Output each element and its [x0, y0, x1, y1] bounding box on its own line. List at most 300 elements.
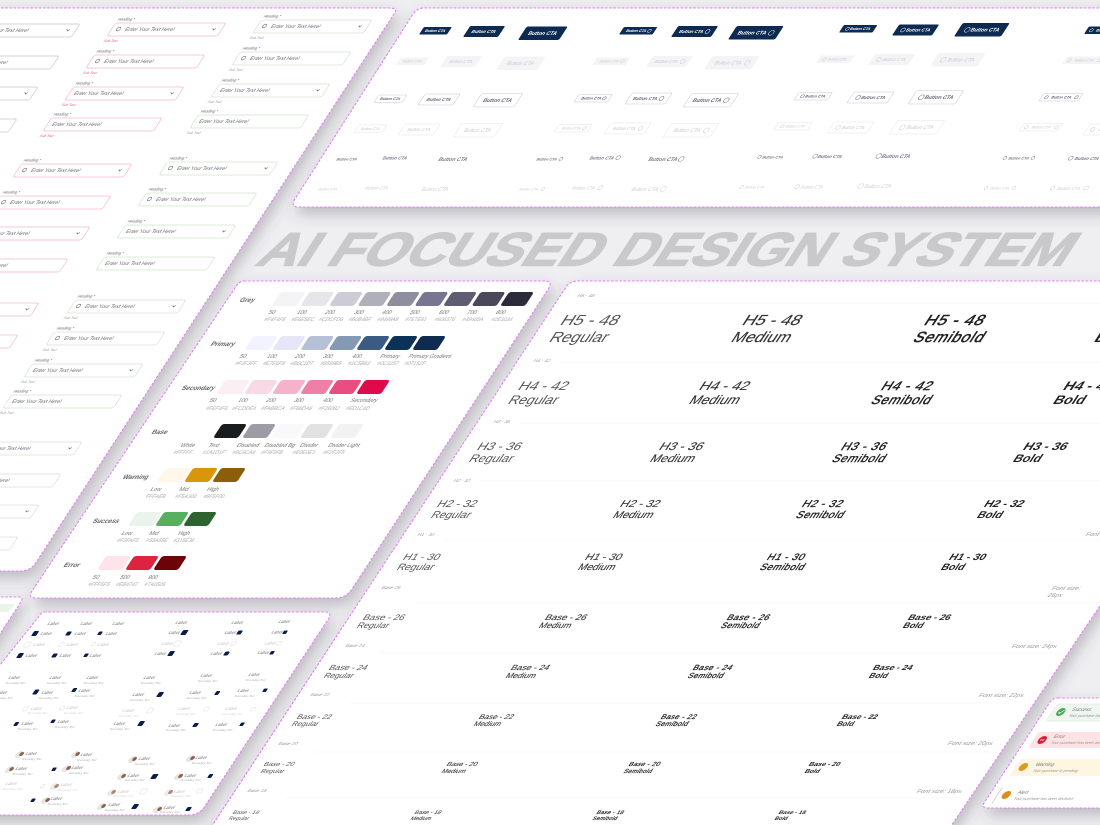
- success input fields: Sub Text: [249, 35, 266, 40]
- avatar rows: Secondary Text: [158, 810, 181, 814]
- outlined light buttons row: Button CTA: [406, 128, 432, 133]
- text buttons row: Button CTA: [1007, 156, 1031, 160]
- primary swatches: 400: [350, 353, 364, 360]
- avatar rows: Secondary Text: [46, 802, 69, 806]
- Base 22 type row: Medium: [472, 720, 504, 728]
- default input fields: [0, 24, 80, 132]
- outlined buttons row: Button CTA: [804, 94, 827, 99]
- Base 26 type row: [355, 586, 1082, 630]
- avatar rows: Secondary Text: [56, 788, 79, 792]
- avatar rows: Label: [116, 789, 130, 795]
- avatar rows: Label: [183, 773, 197, 779]
- disabled buttons row: Button CTA: [505, 62, 535, 67]
- Base 26 type row: Base - 26: [725, 613, 773, 622]
- primary buttons row: [419, 23, 1100, 40]
- panel: buttons: [293, 8, 1100, 207]
- success swatches: #55A55E: [144, 538, 169, 544]
- title: AI FOCUSED DESIGN SYSTEM: [248, 223, 1092, 275]
- success input fields: Sub Text: [20, 379, 37, 384]
- disabled buttons row: [396, 53, 1100, 70]
- toast: warning: [1009, 759, 1100, 776]
- text buttons row: Button CTA: [1073, 156, 1100, 162]
- outlined buttons row: Button CTA: [379, 96, 402, 101]
- success input fields: Heading *: [55, 326, 76, 330]
- error input fields: Heading *: [22, 158, 43, 162]
- error input fields: Heading *: [95, 49, 116, 53]
- warning swatches: [121, 468, 246, 500]
- Base 26 type row: Base - 26: [360, 613, 407, 623]
- outlined buttons row: Button CTA: [691, 99, 723, 104]
- H1 type row: H1 - 30: [582, 552, 625, 563]
- grey swatches: #606576: [433, 317, 456, 323]
- checkbox rows without secondary text: Label: [230, 620, 244, 626]
- primary swatches: Primary: [209, 341, 237, 348]
- H2 type row: [428, 479, 1028, 521]
- Base 24 type row: Base - 24: [871, 663, 915, 672]
- avatar rows: Label: [4, 781, 18, 787]
- checkbox rows with secondary text: Label: [112, 721, 126, 727]
- H4 type row: [505, 359, 1100, 407]
- warning swatches: Warning: [121, 474, 150, 481]
- checkbox rows with secondary text: Label: [7, 675, 21, 681]
- base swatches: Base: [150, 429, 169, 436]
- success input fields: Heading *: [12, 389, 33, 393]
- disabled buttons row: Button CTA: [713, 61, 743, 67]
- outlined buttons row: Button CTA: [859, 96, 887, 101]
- checkbox rows with secondary text: Secondary Text: [211, 728, 234, 732]
- outlined light buttons row: Button CTA: [905, 126, 935, 131]
- checkbox rows with secondary text: Secondary Text: [221, 712, 244, 716]
- primary swatches: #3C5B83: [346, 361, 371, 367]
- base swatches: Divider: [298, 442, 320, 449]
- success input fields: Heading *: [105, 251, 126, 255]
- Base 20 type row: Base - 20: [445, 762, 479, 768]
- grey swatches: 700: [465, 309, 479, 316]
- error input fields: Heading *: [1, 190, 22, 194]
- Base 24 type row: [322, 644, 1059, 680]
- disabled buttons row: Button CTA: [599, 59, 621, 64]
- checkbox rows with secondary text: Secondary Text: [164, 728, 187, 732]
- primary swatches: #8599B5: [318, 361, 343, 367]
- H2 type row: H2 - 32: [799, 499, 846, 510]
- primary buttons row: Button CTA: [677, 30, 705, 35]
- checkbox rows without secondary text: Label: [277, 619, 291, 625]
- text light buttons row: Button CTA: [630, 187, 660, 193]
- checkbox rows without secondary text: Label: [223, 630, 237, 636]
- primary swatches: 50: [238, 353, 249, 360]
- error input fields: Sub Text: [103, 38, 120, 43]
- H1 type row: Bold: [938, 562, 968, 573]
- success input fields: Heading *: [126, 219, 147, 223]
- primary buttons row: Button CTA: [625, 28, 648, 33]
- checkbox rows without secondary text: Label: [46, 621, 60, 627]
- H5 type row: H5 - 48: [739, 312, 807, 328]
- error swatches: 50: [91, 574, 102, 581]
- avatar rows: Secondary Text: [103, 808, 126, 812]
- H3 type row: H3 - 36: [492, 420, 512, 425]
- warning swatches: #8F5F00: [201, 494, 226, 500]
- secondary swatches: 50: [208, 397, 219, 404]
- avatar rows: Secondary Text: [1, 787, 24, 791]
- base swatches: Disabled Bg: [263, 442, 298, 449]
- checkbox rows without secondary text: Label: [153, 651, 167, 657]
- Base 20 type row: Base-20: [277, 742, 299, 747]
- grey swatches: #7E7E91: [403, 317, 428, 323]
- Base 18 type row: Regular: [227, 817, 250, 822]
- H2 type row: Bold: [974, 510, 1006, 521]
- text buttons row: Button CTA: [535, 157, 559, 161]
- checkbox rows without secondary text: Label: [160, 641, 174, 647]
- success input fields: Enter Your Text Here!: [154, 197, 207, 203]
- secondary swatches: 200: [264, 397, 278, 404]
- avatar rows: Label: [137, 756, 151, 762]
- H4 type row: Bold: [1050, 394, 1090, 407]
- Base 22 type row: Bold: [835, 720, 857, 728]
- Base 20 type row: Medium: [440, 769, 468, 775]
- base swatches: Disabled: [235, 442, 261, 449]
- warning swatches: #F5A300: [173, 494, 198, 500]
- success input fields: Heading *: [241, 46, 262, 50]
- base swatches: White: [179, 442, 198, 449]
- Base 22 type row: Font size: 22px: [977, 693, 1026, 699]
- checkbox rows with secondary text: Label: [131, 692, 145, 698]
- avatar rows: Secondary Text: [11, 772, 34, 776]
- success swatches: Low: [120, 530, 135, 537]
- checkbox rows with secondary text: Label: [56, 719, 70, 725]
- error input fields: Enter Your Text Here!: [123, 27, 176, 33]
- Base 20 type row: Base - 20: [627, 762, 662, 768]
- error input fields: [0, 17, 230, 348]
- Base 24 type row: Medium: [504, 671, 539, 680]
- text light buttons row: Button CTA: [799, 185, 825, 190]
- avatar rows: Secondary Text: [112, 794, 135, 798]
- panel: toast notifications: [983, 698, 1100, 808]
- H4 type row: H4 - 42: [532, 359, 552, 364]
- text buttons row: Button CTA: [588, 156, 616, 161]
- primary buttons row: Button CTA: [736, 31, 768, 37]
- Base 24 type row: Bold: [867, 671, 891, 680]
- panel: typography: [206, 281, 1100, 825]
- grey swatches: 100: [295, 309, 309, 316]
- secondary swatches: #F26082: [317, 406, 341, 412]
- warning swatches: Mid: [177, 486, 191, 493]
- checkbox rows with secondary text: Label: [40, 690, 54, 696]
- outlined light buttons row: Button CTA: [462, 129, 492, 134]
- success input fields: Heading *: [76, 294, 97, 298]
- checkbox rows with secondary text: Label: [48, 675, 62, 681]
- success input fields: Sub Text: [63, 315, 80, 320]
- secondary swatches: #FEF4F6: [204, 406, 229, 412]
- checkbox rows with secondary text: Secondary Text: [37, 696, 60, 700]
- text buttons row: Button CTA: [880, 154, 912, 160]
- secondary swatches: 300: [292, 397, 306, 404]
- secondary swatches: 400: [321, 397, 335, 404]
- checkbox rows with secondary text: Secondary Text: [45, 681, 68, 685]
- H3 type row: H3 - 36: [474, 440, 526, 453]
- checkbox rows with secondary text: Label: [199, 673, 213, 679]
- Base 24 type row: Base-24: [344, 644, 366, 649]
- panel: colour palette: [30, 281, 550, 598]
- outlined light buttons row: Button CTA: [360, 126, 382, 131]
- success input fields: Heading *: [33, 358, 54, 362]
- outlined light buttons row: [354, 120, 1100, 137]
- grey swatches: #49405A: [460, 317, 485, 323]
- success swatches: High: [176, 530, 192, 537]
- toast: error: Error: [1052, 734, 1067, 740]
- secondary swatches: 100: [236, 397, 250, 404]
- outlined buttons row: Button CTA: [631, 97, 659, 102]
- base swatches: #E0E0E3: [291, 450, 316, 456]
- avatar rows: Label: [14, 766, 28, 772]
- H4 type row: H4 - 42: [878, 380, 937, 393]
- primary swatches: Primary: [378, 353, 402, 360]
- error input fields: Enter Your Text Here!: [72, 91, 125, 97]
- checkbox rows with secondary text: Label: [177, 706, 191, 712]
- Base 26 type row: Regular: [355, 621, 392, 630]
- text buttons row: Button CTA: [437, 157, 469, 163]
- Base 26 type row: Semibold: [719, 621, 763, 630]
- H5 type row: Regular: [546, 329, 614, 345]
- grey swatches: 800: [494, 309, 508, 316]
- primary buttons row: Button CTA: [470, 30, 498, 35]
- Base 24 type row: Base - 24: [509, 663, 552, 672]
- H1 type row: Semibold: [757, 563, 808, 573]
- checkbox rows without secondary text: Label: [58, 653, 72, 659]
- success input fields: Heading *: [220, 78, 241, 82]
- Base 18 type row: Base - 18: [777, 810, 808, 816]
- outlined buttons row: [374, 90, 1083, 107]
- Base 24 type row: Font size: 24px: [1010, 644, 1059, 650]
- avatar rows: Label: [126, 773, 140, 779]
- secondary swatches: #FABBCA: [259, 406, 286, 412]
- primary swatches: #F3F3FF: [233, 361, 259, 367]
- text light buttons row: Button CTA: [364, 186, 390, 191]
- H5 type row: Semibold: [910, 330, 990, 346]
- H1 type row: Medium: [575, 562, 619, 573]
- primary swatches: #E7E6F8: [261, 361, 286, 367]
- primary swatches: 300: [321, 353, 335, 360]
- success swatches: #315E36: [171, 538, 196, 544]
- Base 20 type row: Base - 20: [807, 762, 842, 768]
- outlined light buttons row: Button CTA: [611, 127, 638, 132]
- grey swatches: Grey: [238, 297, 257, 304]
- Base 18 type row: [227, 789, 964, 822]
- base swatches: #F9F9FB: [259, 450, 284, 456]
- checkbox rows with secondary text: Secondary Text: [108, 727, 131, 731]
- success input fields: Enter Your Text Here!: [10, 399, 63, 405]
- H1 type row: [394, 532, 1100, 573]
- success input fields: Enter Your Text Here!: [83, 304, 136, 310]
- text buttons row: Button CTA: [647, 157, 679, 163]
- primary buttons row: Button CTA: [969, 28, 1001, 34]
- grey swatches: #2E3034: [489, 317, 515, 323]
- grey swatches: #CDCFD6: [317, 317, 344, 323]
- Base 26 type row: Base-26: [380, 586, 402, 591]
- H2 type row: Medium: [610, 510, 656, 521]
- checkbox rows with secondary text: Secondary Text: [26, 711, 49, 715]
- checkbox rows without secondary text: Label: [24, 653, 38, 659]
- checkbox rows without secondary text: Label: [216, 641, 230, 647]
- base swatches: [150, 424, 364, 456]
- base swatches: #FFFFF: [171, 450, 194, 456]
- avatar rows: [1, 751, 214, 814]
- checkbox rows without secondary text: Label: [73, 631, 87, 637]
- checkbox rows with secondary text: Label: [236, 688, 250, 694]
- success swatches: [91, 512, 217, 544]
- text light buttons row: Button CTA: [1056, 186, 1082, 192]
- checkbox rows with secondary text: Label: [224, 706, 238, 712]
- secondary swatches: Secondary: [348, 397, 380, 404]
- success input fields: Enter Your Text Here!: [197, 119, 250, 125]
- H1 type row: Regular: [394, 562, 438, 573]
- checkbox rows with secondary text: Secondary Text: [128, 698, 151, 702]
- avatar rows: Secondary Text: [20, 757, 43, 761]
- primary swatches: [209, 336, 453, 367]
- text light buttons row: Button CTA: [518, 187, 540, 191]
- Base 20 type row: Font size: 20px: [946, 741, 995, 747]
- success input fields: Enter Your Text Here!: [218, 88, 271, 94]
- H3 type row: H3 - 36: [656, 440, 708, 453]
- checkbox rows with secondary text: Secondary Text: [117, 714, 140, 718]
- text buttons row: Button CTA: [381, 156, 409, 161]
- disabled buttons row: Button CTA: [448, 60, 474, 65]
- checkbox rows with secondary text: Secondary Text: [233, 694, 256, 698]
- error input fields: Heading *: [74, 81, 95, 85]
- avatar rows: Secondary Text: [169, 794, 192, 798]
- H5 type row: Medium: [728, 329, 797, 345]
- disabled buttons row: Button CTA: [653, 60, 680, 65]
- checkbox rows with secondary text: Label: [77, 688, 91, 694]
- disabled buttons row: Button CTA: [402, 59, 424, 64]
- Base 18 type row: Medium: [409, 817, 433, 822]
- H3 type row: H3 - 36: [838, 440, 891, 453]
- Base 22 type row: Base-22: [309, 693, 331, 698]
- checkbox rows without secondary text: Label: [104, 631, 118, 637]
- success input fields: Enter Your Text Here!: [31, 368, 84, 374]
- checkbox rows without secondary text: Label: [88, 653, 102, 659]
- checkbox rows with secondary text: Secondary Text: [185, 696, 208, 700]
- error swatches: #EB4747: [114, 582, 139, 588]
- success swatches: Mid: [147, 530, 161, 537]
- checkbox rows without secondary text: Label: [263, 641, 277, 646]
- Base 26 type row: Medium: [537, 621, 575, 630]
- H2 type row: H2 - 32: [981, 498, 1028, 510]
- success input fields: Heading *: [168, 156, 189, 160]
- Base 20 type row: Base - 20: [262, 762, 296, 768]
- checkbox rows with secondary text: Label: [65, 705, 79, 711]
- avatar rows: Label: [24, 751, 38, 757]
- error input fields: Heading *: [116, 17, 137, 21]
- primary buttons row: Button CTA: [424, 28, 447, 33]
- checkbox rows with secondary text: Secondary Text: [196, 679, 219, 683]
- Base 26 type row: 26px: [1046, 593, 1065, 599]
- toast: alert: Alert: [1016, 790, 1030, 796]
- Base 20 type row: Semibold: [622, 769, 654, 775]
- error swatches: 500: [118, 574, 132, 581]
- outlined light buttons row: Button CTA: [1031, 125, 1053, 130]
- error input fields: Enter Your Text Here!: [29, 168, 82, 174]
- base swatches: #9C9CA4: [231, 450, 257, 456]
- success input fields: Heading *: [262, 14, 283, 18]
- avatar rows: Secondary Text: [190, 761, 213, 765]
- Base 22 type row: Base - 22: [477, 713, 517, 721]
- avatar rows: Label: [79, 752, 93, 758]
- H3 type row: Bold: [1010, 452, 1046, 465]
- Base 24 type row: Base - 24: [327, 663, 370, 672]
- outlined light buttons row: Button CTA: [561, 126, 583, 131]
- checkbox rows with secondary text: Secondary Text: [16, 727, 39, 731]
- disabled buttons row: Button CTA: [827, 57, 849, 62]
- checkbox rows without secondary text: Label: [256, 650, 270, 656]
- error input fields: Enter Your Text Here!: [8, 200, 61, 206]
- grey swatches: 400: [380, 309, 394, 316]
- H5 type row: H5 - 48: [557, 312, 625, 328]
- Base 18 type row: Base - 18: [413, 810, 443, 816]
- text buttons row: [335, 154, 1100, 163]
- toast: error: [1028, 732, 1100, 748]
- base swatches: Text: [207, 442, 221, 449]
- base swatches: #F2F2F5: [321, 450, 346, 456]
- checkbox rows without secondary text: Label: [79, 621, 93, 627]
- panel: input fields: [0, 8, 396, 652]
- outlined buttons row: Button CTA: [923, 96, 955, 101]
- outlined buttons row: Button CTA: [1050, 95, 1073, 100]
- text light buttons row: Button CTA: [571, 186, 597, 191]
- H3 type row: H3 - 36: [1020, 440, 1072, 453]
- checkbox rows with secondary text: Label: [85, 675, 99, 681]
- toast: success: [1046, 704, 1100, 721]
- Base 26 type row: Base - 26: [542, 613, 589, 623]
- Base 26 type row: Bold: [901, 621, 927, 630]
- Base 18 type row: Base-18: [246, 789, 268, 794]
- checkbox rows with secondary text: [0, 672, 268, 732]
- success input fields: Enter Your Text Here!: [124, 229, 177, 235]
- Base 22 type row: Semibold: [654, 720, 691, 728]
- H3 type row: Regular: [466, 452, 519, 465]
- H1 type row: H1 - 30: [416, 533, 436, 538]
- avatar rows: Secondary Text: [67, 771, 90, 775]
- success input fields: Enter Your Text Here!: [103, 261, 156, 267]
- success swatches: #F3FAF5: [115, 538, 140, 544]
- checkbox rows with secondary text: Secondary Text: [53, 725, 76, 729]
- warning swatches: High: [205, 486, 221, 493]
- grey swatches: 600: [437, 309, 451, 316]
- outlined light buttons row: Button CTA: [840, 126, 867, 131]
- primary swatches: Primary Gradient: [407, 353, 453, 360]
- primary swatches: 100: [265, 353, 279, 360]
- Base 26 type row: Font size:: [1050, 586, 1082, 592]
- Base 24 type row: Regular: [322, 671, 357, 680]
- toast: alert: [991, 787, 1100, 804]
- Base 24 type row: Base - 24: [691, 663, 736, 672]
- toast: warning: Your purchase is pending: [1032, 768, 1080, 773]
- grey swatches: [238, 292, 534, 323]
- primary swatches: #B6C1D7: [289, 361, 315, 367]
- secondary swatches: #F88DA6: [288, 406, 313, 412]
- success input fields: Sub Text: [42, 347, 59, 352]
- checkbox rows with secondary text: Secondary Text: [174, 712, 197, 716]
- checkbox rows without secondary text: Label: [111, 621, 125, 627]
- text buttons row: Button CTA: [816, 154, 844, 160]
- success input fields: Enter Your Text Here!: [62, 336, 115, 342]
- outlined buttons row: Button CTA: [425, 98, 453, 103]
- checkbox rows with secondary text: Secondary Text: [62, 711, 85, 715]
- avatar rows: Label: [194, 755, 208, 761]
- Base 22 type row: Base - 22: [659, 713, 699, 721]
- H4 type row: H4 - 42: [696, 380, 753, 393]
- grey swatches: #E6E5EC: [289, 317, 316, 323]
- secondary swatches: #FCDDE4: [230, 406, 258, 412]
